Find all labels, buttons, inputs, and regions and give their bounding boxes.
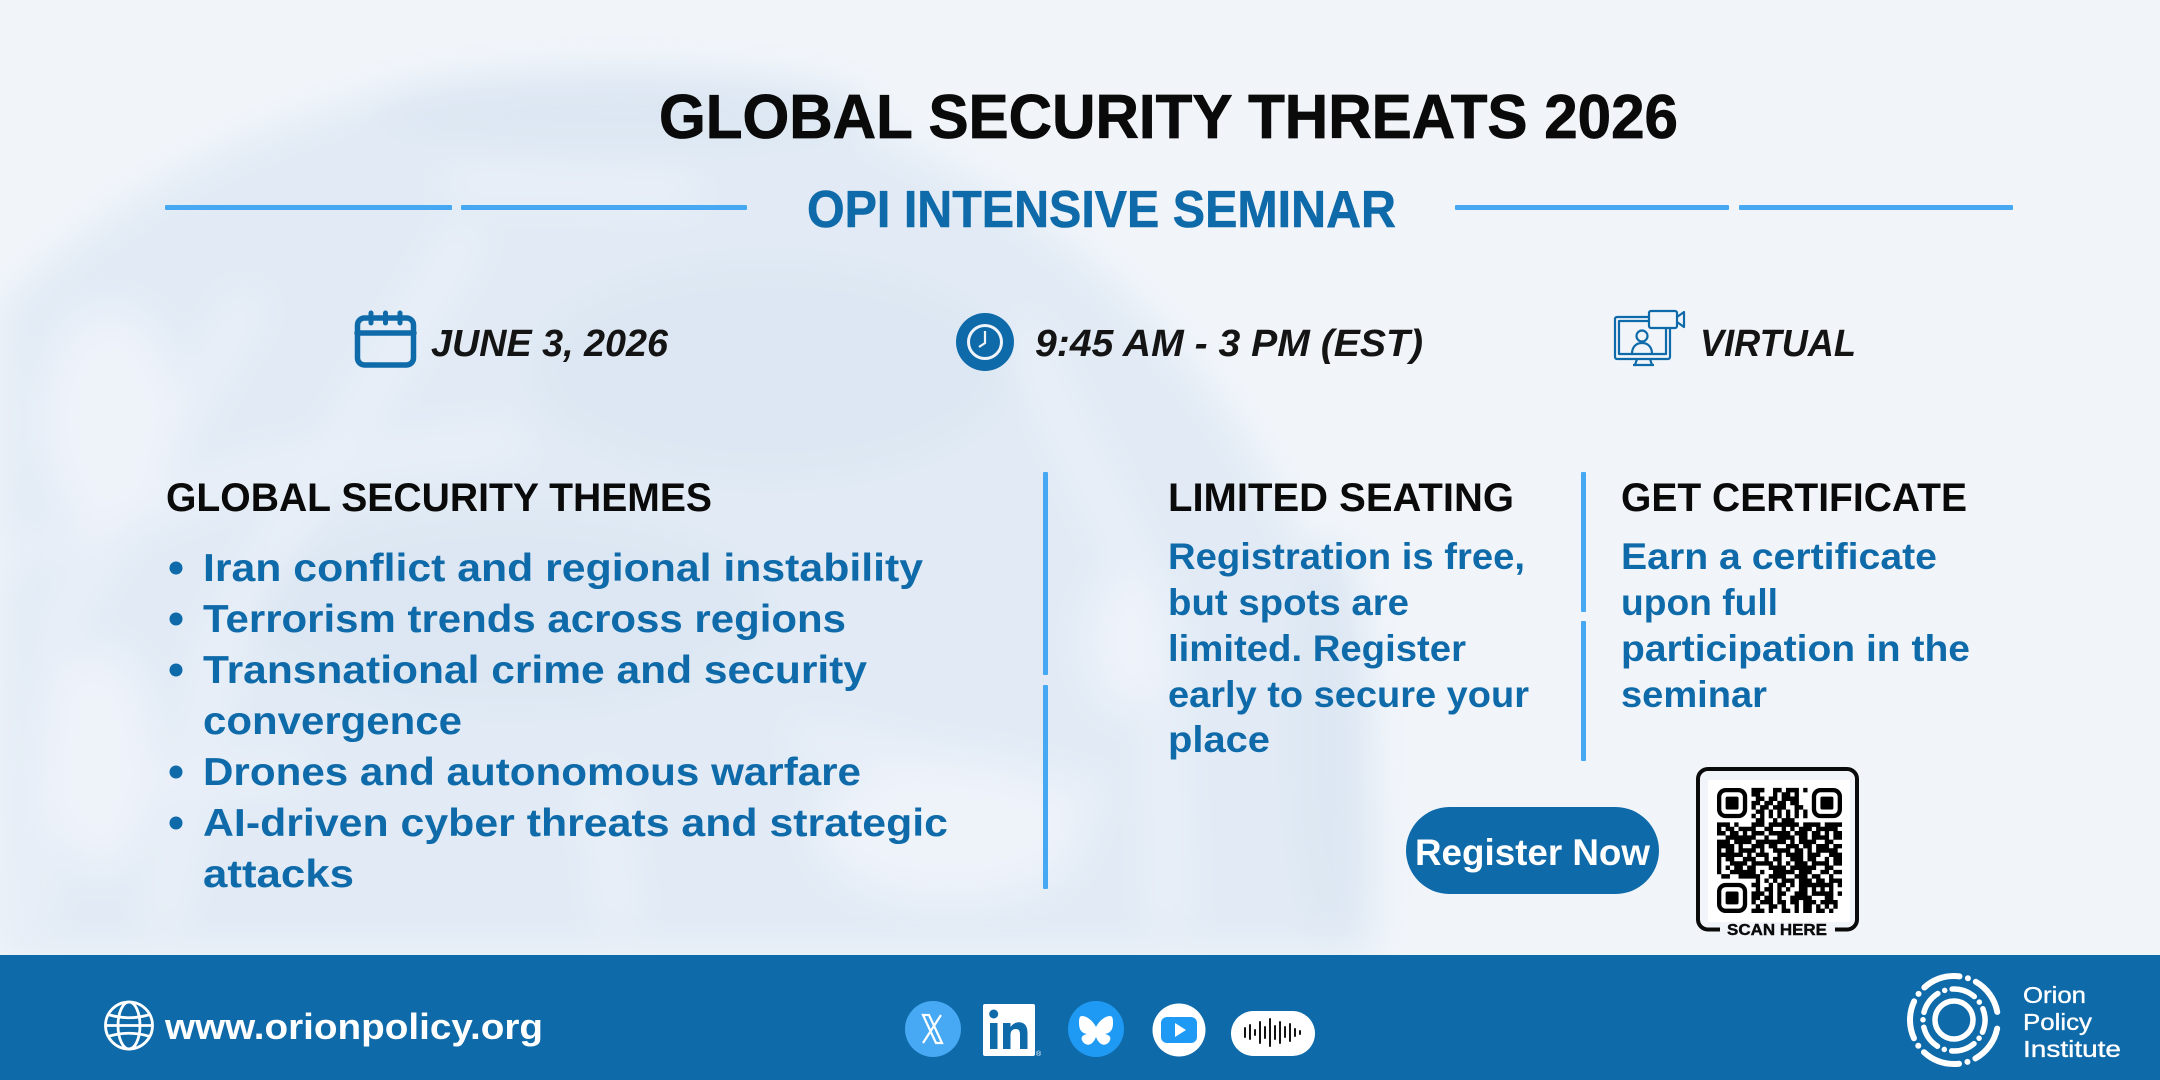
text: limited seating body: but spots are — [1168, 582, 1409, 623]
subtitle: OPI INTENSIVE SEMINAR — [807, 181, 1396, 239]
logo text: Policy — [2023, 1009, 2093, 1035]
icon: linkedin: ® — [1036, 1050, 1042, 1058]
icon: podcast waveform — [1231, 1011, 1315, 1056]
text: limited seating body — [1168, 536, 1529, 760]
text: certificate body: upon full — [1621, 582, 1778, 623]
qr code with scan here frame — [1698, 769, 1857, 939]
heading: get certificate: GET CERTIFICATE — [1621, 476, 1967, 520]
icon: globe — [106, 1002, 152, 1049]
button: register now: Register Now — [1415, 832, 1650, 873]
logo: orion policy institute — [1910, 976, 2121, 1064]
bullet list — [170, 547, 948, 896]
icon: calendar — [357, 313, 414, 365]
text: virtual: VIRTUAL — [1700, 323, 1856, 365]
title: GLOBAL SECURITY THREATS 2026 — [659, 83, 1678, 152]
bullet list: AI-driven cyber threats and strategic — [203, 802, 948, 845]
bullet list: Drones and autonomous warfare — [203, 751, 861, 794]
button: register now — [1406, 807, 1659, 894]
subtitle rules — [165, 205, 2013, 210]
bullet list: Terrorism trends across regions — [203, 598, 846, 641]
panel: limited seating — [1168, 476, 1529, 760]
text: limited seating body: Registration is free, — [1168, 536, 1525, 577]
time: 9:45 AM - 3 PM (EST) — [1035, 323, 1423, 365]
text: limited seating body: place — [1168, 719, 1270, 760]
panel: get certificate — [1621, 476, 1970, 715]
logo text — [2023, 982, 2121, 1062]
icon: x — [905, 1001, 961, 1057]
divider right — [1581, 472, 1586, 761]
icon: youtube — [1152, 1004, 1206, 1056]
heading: limited seating: LIMITED SEATING — [1168, 476, 1514, 520]
qr pattern — [1717, 790, 1842, 911]
logo mark — [1910, 976, 1998, 1064]
icon: bluesky — [1068, 1001, 1124, 1057]
background: blurred globe — [0, 70, 1377, 955]
bullet list: Transnational crime and security — [203, 649, 867, 692]
text: limited seating body: limited. Register — [1168, 628, 1466, 669]
bullet list: Iran conflict and regional instability — [203, 547, 923, 590]
text: certificate body — [1621, 536, 1970, 715]
logo text: Orion — [2023, 982, 2086, 1008]
text: certificate body: participation in the — [1621, 628, 1970, 669]
scan here label: SCAN HERE — [1727, 922, 1827, 939]
logo text: Institute — [2023, 1036, 2121, 1062]
date: JUNE 3, 2026 — [431, 323, 669, 365]
footer bar — [0, 955, 2160, 1080]
icon: linkedin — [983, 1004, 1042, 1058]
icon: virtual video screen — [1615, 311, 1684, 365]
text: limited seating body: early to secure your — [1168, 674, 1529, 715]
divider left — [1043, 472, 1048, 889]
bullet list: attacks — [203, 853, 354, 896]
website url: www.orionpolicy.org — [164, 1006, 543, 1047]
text: certificate body: seminar — [1621, 674, 1767, 715]
icon: clock — [956, 313, 1014, 371]
bullet list: convergence — [203, 700, 462, 743]
text: certificate body: Earn a certificate — [1621, 536, 1937, 577]
panel: global security themes — [166, 476, 948, 896]
heading: themes: GLOBAL SECURITY THEMES — [166, 476, 712, 520]
